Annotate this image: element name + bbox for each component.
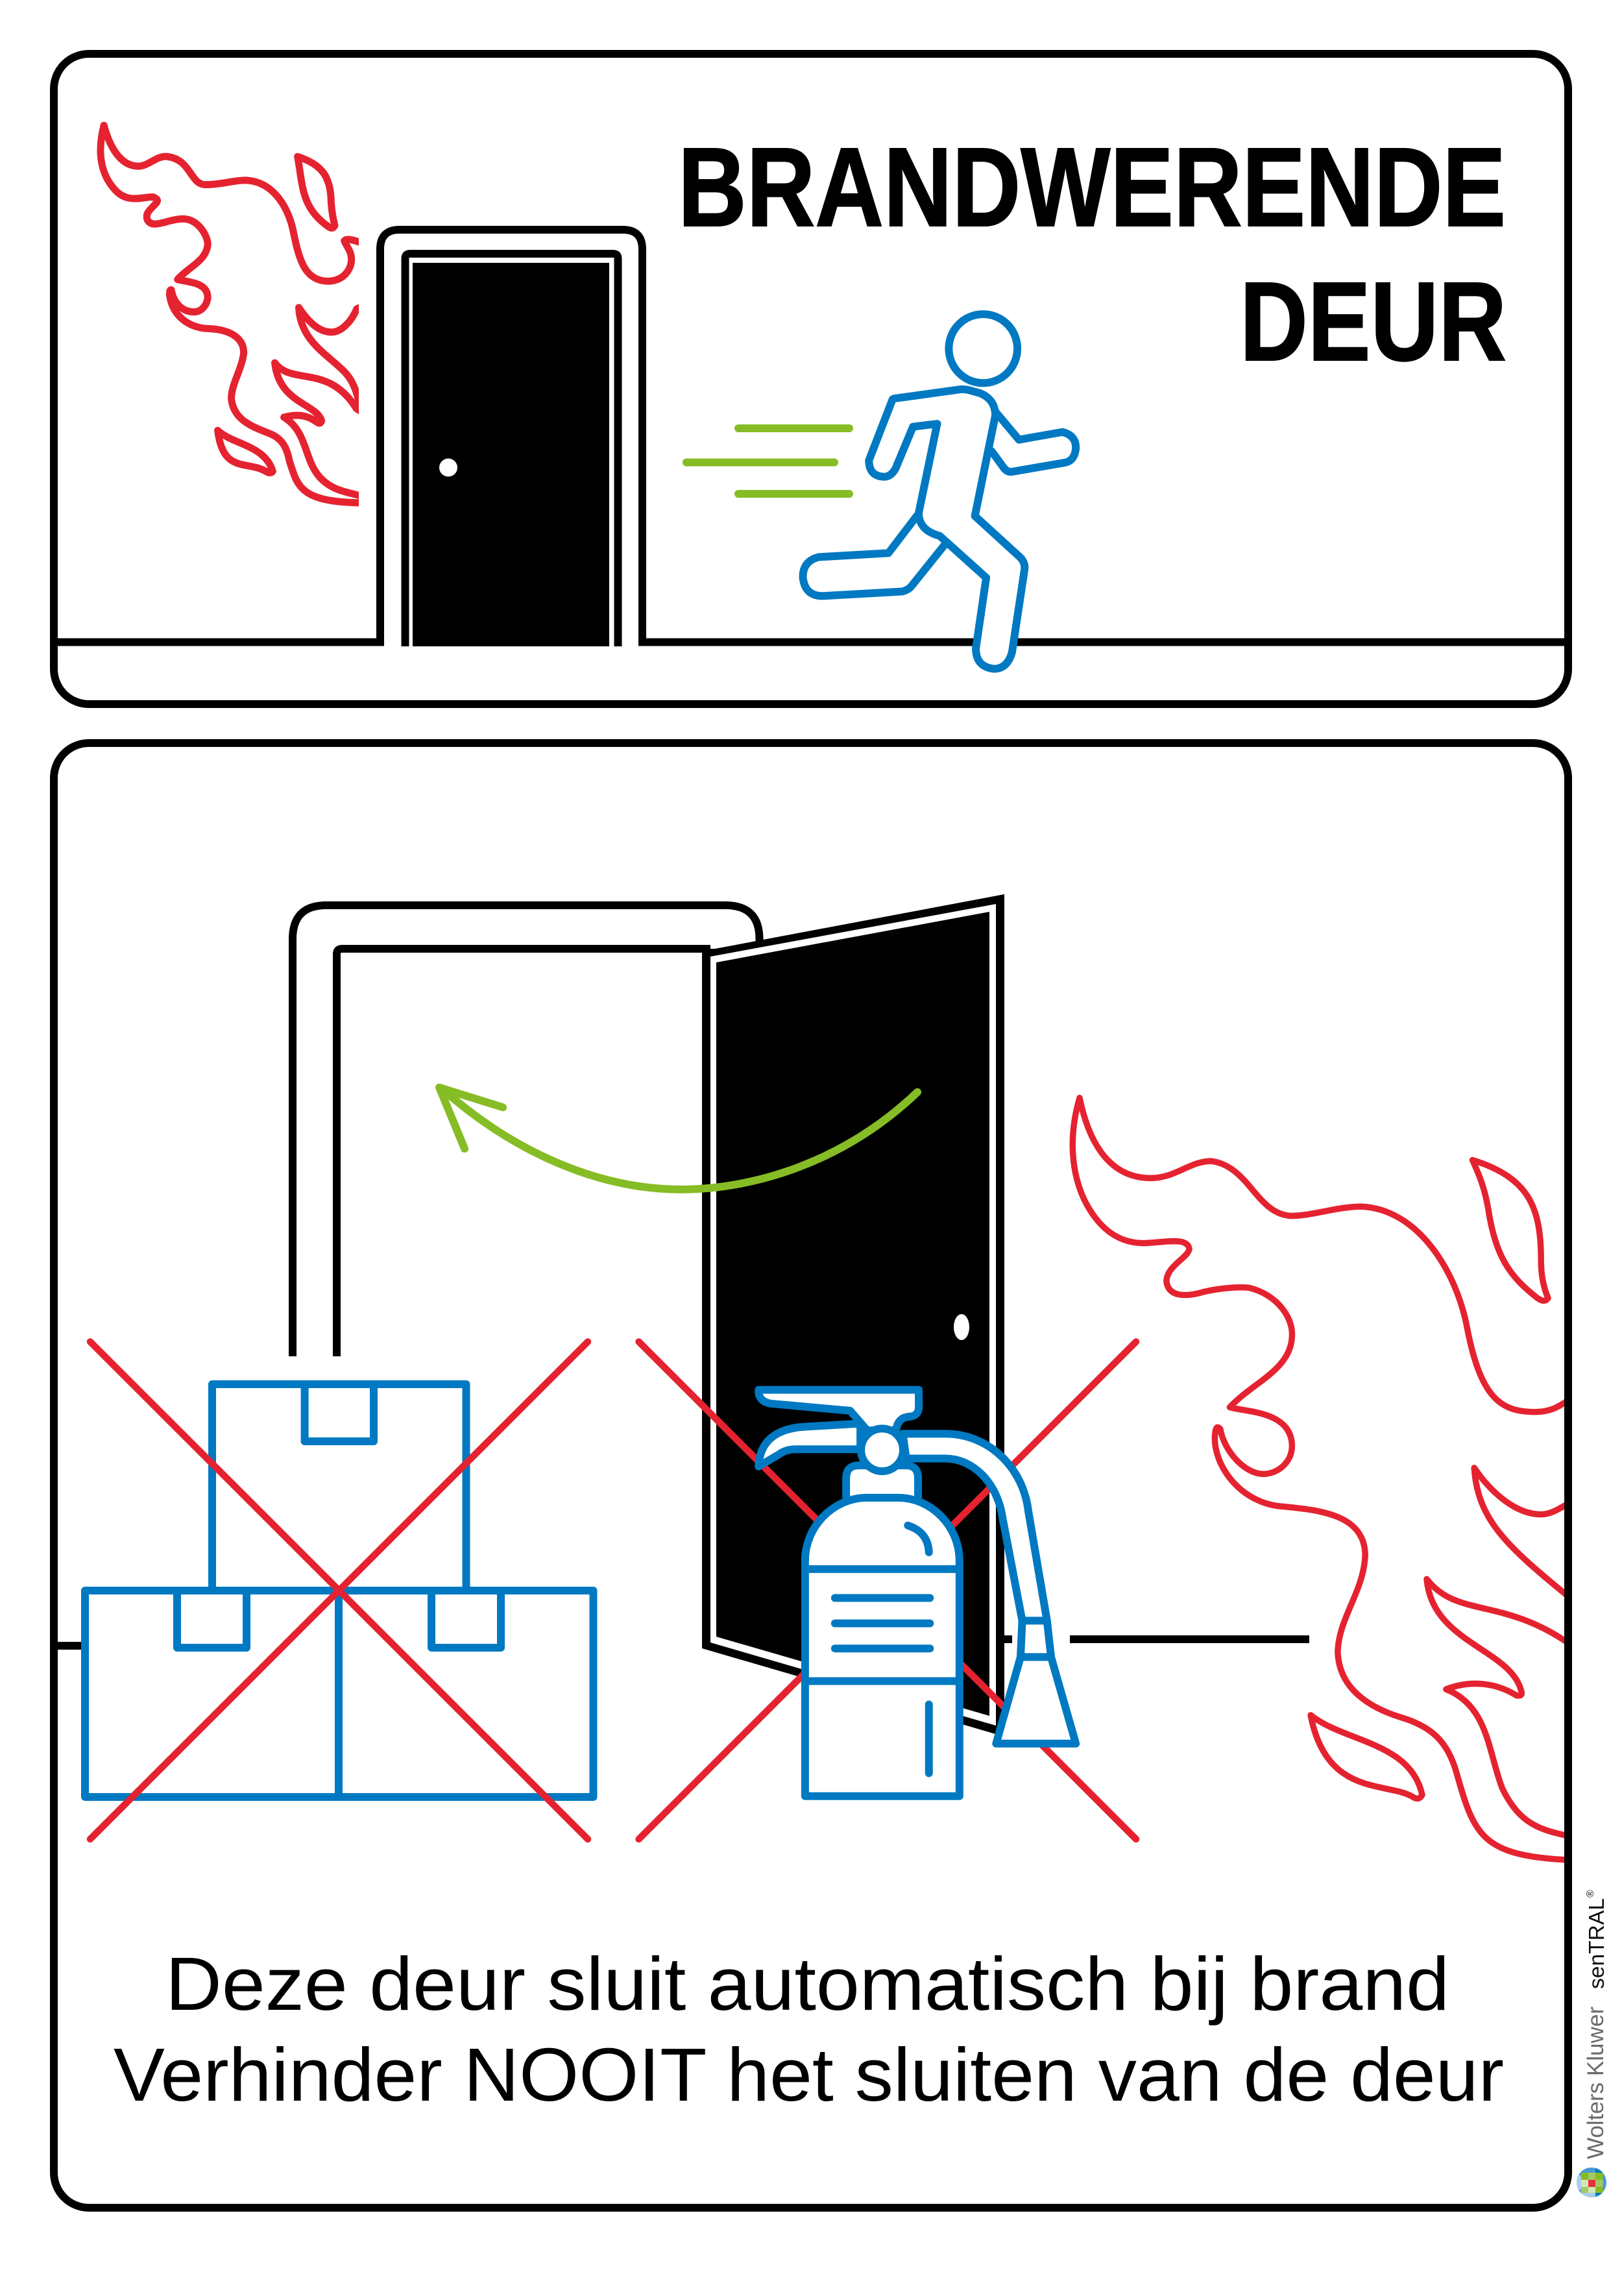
text: instruction: Deze deur sluit automatisch bij brand (165, 1942, 1449, 2026)
text: instruction: Verhinder NOOIT het sluiten van de deur (114, 2033, 1504, 2117)
text: instruction (114, 1942, 1504, 2117)
icon: stacked boxes (85, 1384, 593, 1797)
icon: green speed lines (686, 428, 849, 494)
logo: Wolters Kluwer senTRAL (1577, 1890, 1608, 2198)
icon: running person (803, 314, 1076, 669)
panel frame: bottom (54, 743, 1568, 2208)
text: senTRAL: senTRAL (1584, 1898, 1608, 1989)
text: registered mark: ® (1585, 1890, 1596, 1898)
icon: fire extinguisher (758, 1390, 1076, 1796)
icon: door frame in wall (54, 905, 1309, 1646)
icon: red cross over boxes (90, 1342, 588, 1839)
panel: bottom sign with open door, prohibited items and instruction (54, 743, 1569, 2208)
icon: flames behind door (101, 125, 361, 503)
icon: closed fire door with frame (58, 230, 1564, 646)
icon: open fire door (702, 894, 1004, 1737)
icon: flames beside door (1072, 1098, 1569, 1860)
title: Brandwerende deur: DEUR (1240, 258, 1507, 384)
icon: red cross over extinguisher (639, 1342, 1136, 1839)
arrow: door closing direction (439, 1088, 917, 1190)
title: Brandwerende deur (678, 124, 1507, 384)
panel: top sign with door, flames and running person (54, 54, 1568, 704)
panel frame: top (54, 54, 1568, 704)
icon: Wolters Kluwer globe (1577, 2168, 1606, 2198)
text: Wolters Kluwer: Wolters Kluwer (1583, 2007, 1608, 2159)
